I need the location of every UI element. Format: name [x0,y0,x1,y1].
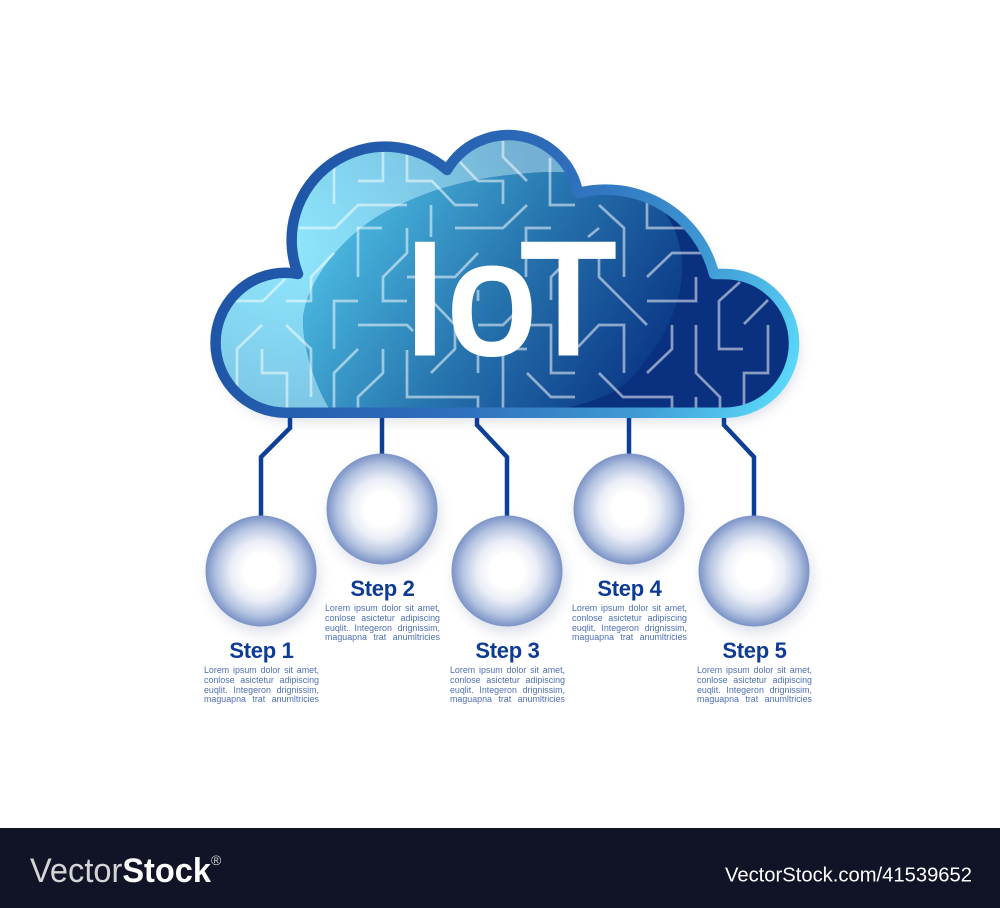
text block: step 3: conlose asictetur adipiscing [450,675,565,685]
circle: step 2 [326,454,440,571]
text block: step 1: Lorem ipsum dolor sit amet, [204,665,319,675]
circuit traces [236,141,768,410]
text block: step 3: euqlit. Integeron drignissim, [450,685,565,695]
text: Step 2 [350,576,415,600]
connector lines [261,416,754,517]
connector: step 3 [477,416,507,517]
text: Step 3 [475,638,540,662]
text block: step 4: conlose asictetur adipiscing [572,613,687,623]
connector: step 1 [261,416,290,517]
text: Step 1 [229,638,294,662]
connector: step 4 [627,416,631,455]
text block: step 3: maguapna trat anumltricies [450,694,565,704]
IoT cloud [210,130,800,418]
text block: step 4 [572,576,687,642]
text block: step 5: euqlit. Integeron drignissim, [697,685,812,695]
cloud outline [216,135,794,413]
text block: step 1: euqlit. Integeron drignissim, [204,685,319,695]
circle: step 4 [574,454,687,571]
circle: step 5 [698,516,812,633]
text block: step 5 [697,638,812,704]
cloud fill layers [220,140,789,408]
text block: step 2: Lorem ipsum dolor sit amet, [325,603,440,613]
text block: step 4: euqlit. Integeron drignissim, [572,623,687,633]
text block: step 4: Lorem ipsum dolor sit amet, [572,603,687,613]
text block: step 1 [204,638,319,704]
text block: step 3 [450,638,565,704]
text block: step 2: euqlit. Integeron drignissim, [325,623,440,633]
connector: step 5 [724,416,754,517]
footer bar [0,828,1000,908]
text block: step 4: maguapna trat anumltricies [572,632,687,642]
circle: step 1 [206,516,319,633]
text block: step 1: conlose asictetur adipiscing [204,675,319,685]
text: Step 4 [597,576,662,600]
circle: step 3 [452,516,565,633]
connector: step 2 [380,416,384,455]
text block: step 2: conlose asictetur adipiscing [325,613,440,623]
text block: step 5: Lorem ipsum dolor sit amet, [697,665,812,675]
text block: step 1: maguapna trat anumltricies [204,694,319,704]
text block: step 2: maguapna trat anumltricies [325,632,440,642]
cloud drop shadow [220,142,798,420]
text block: step 3: Lorem ipsum dolor sit amet, [450,665,565,675]
IoT title: IoT [403,211,617,387]
image id: VectorStock.com/41539652 [725,864,972,886]
text: Step 5 [722,638,787,662]
registered mark: ® [211,852,222,868]
step circles [206,454,812,633]
text block: step 2 [325,576,440,642]
brand logo: VectorStock [30,852,212,890]
text block: step 5: conlose asictetur adipiscing [697,675,812,685]
text block: step 5: maguapna trat anumltricies [697,694,812,704]
